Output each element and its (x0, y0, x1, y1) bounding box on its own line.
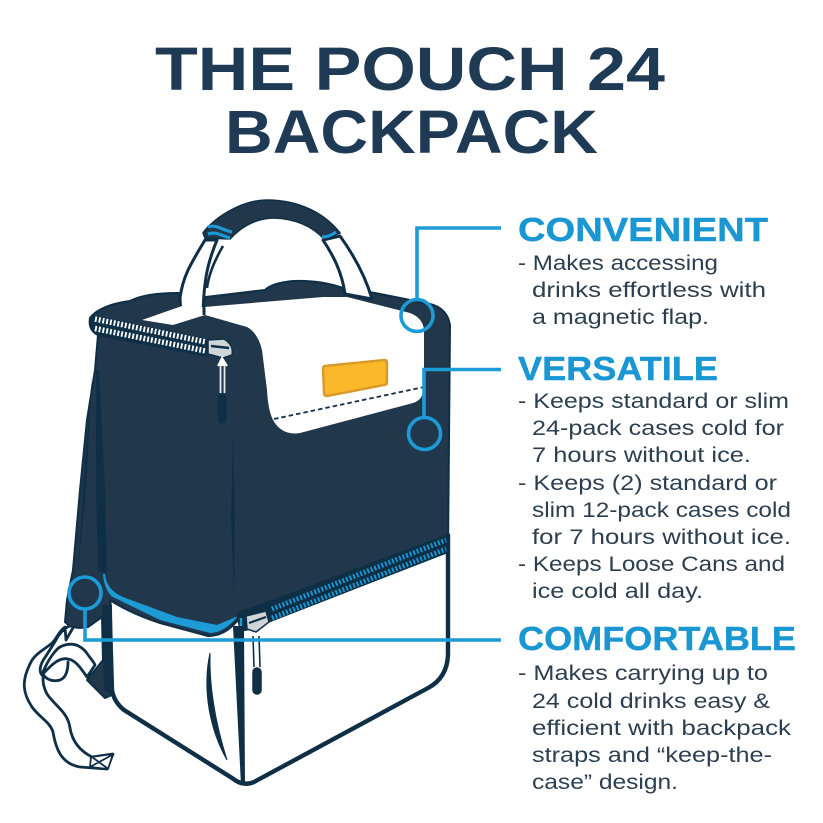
text block: comfortable: straps and “keep-the- (532, 743, 772, 767)
callout: convenient marker (401, 300, 433, 332)
lower white compartment (109, 535, 448, 784)
title: BACKPACK (225, 98, 598, 166)
text block: convenient (518, 211, 768, 329)
bottom trim (103, 574, 238, 633)
text block: versatile: slim 12-pack cases cold (532, 498, 791, 522)
callout: versatile line (424, 370, 501, 417)
lower crease (207, 653, 227, 760)
text block: convenient: CONVENIENT (518, 211, 768, 248)
callout: comfortable line (85, 609, 501, 640)
text block: comfortable: 24 cold drinks easy & (532, 689, 770, 713)
callout: convenient line (417, 228, 501, 299)
text block: comfortable: - Makes carrying up to (518, 661, 768, 685)
callout: comfortable marker (69, 577, 101, 609)
text block: convenient: - Makes accessing (518, 251, 718, 275)
text block: versatile (518, 350, 791, 603)
text block: convenient: drinks effortless with (532, 278, 766, 302)
front corner seam (233, 626, 245, 785)
handle (180, 200, 372, 318)
callout: versatile marker (408, 418, 440, 450)
text block: versatile: 24-pack cases cold for (532, 416, 784, 440)
text block: versatile: VERSATILE (518, 350, 718, 387)
text block: versatile: - Keeps (2) standard or (518, 471, 777, 495)
top zipper (89, 315, 232, 419)
illustration: backpack (24, 200, 450, 785)
navy main body (65, 281, 450, 698)
flap stitching (274, 387, 424, 419)
title: THE POUCH 24 (155, 35, 665, 103)
side panel shading (78, 370, 113, 695)
text block: versatile: - Keeps standard or slim (518, 389, 789, 413)
title (155, 35, 665, 166)
lower zipper (236, 534, 448, 690)
text block: comfortable: case” design. (532, 770, 678, 794)
white lid with flap (142, 297, 424, 433)
strap end over lid (202, 297, 206, 315)
text block: convenient: a magnetic flap. (532, 305, 709, 329)
side strap (24, 626, 113, 769)
text block: versatile: 7 hours without ice. (532, 443, 751, 467)
text block: versatile: - Keeps Loose Cans and (518, 552, 785, 576)
text block: comfortable: COMFORTABLE (518, 620, 796, 657)
text block: comfortable (518, 620, 796, 794)
text block: versatile: for 7 hours without ice. (532, 525, 791, 549)
yellow label (323, 360, 387, 396)
front body seam (231, 433, 235, 593)
text block: versatile: ice cold all day. (532, 579, 703, 603)
text block: comfortable: efficient with backpack (532, 716, 791, 740)
